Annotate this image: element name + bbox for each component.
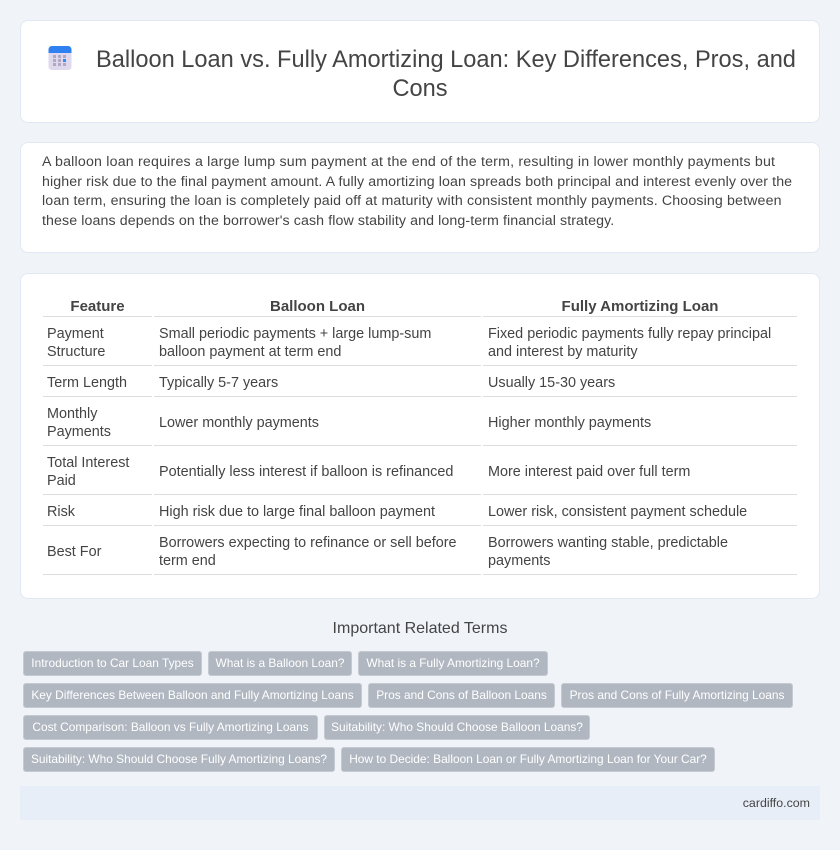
related terms tags: Cost Comparison: Balloon vs Fully Amortizing Loans: [32, 720, 309, 734]
comparison table: Lower monthly payments: [159, 415, 319, 431]
intro paragraph: loan term, ensuring the loan is completely paid off at maturity with consistent monthly payments. Choosing between: [42, 193, 782, 209]
related terms heading: Important Related Terms: [333, 620, 507, 637]
related terms tags: Suitability: Who Should Choose Balloon Loans?: [331, 720, 583, 734]
comparison table: Typically 5-7 years: [159, 375, 278, 391]
comparison table: balloon payment at term end: [159, 344, 341, 360]
panel: intro card: [20, 142, 820, 253]
comparison table: Borrowers expecting to refinance or sell before: [159, 535, 457, 551]
comparison table: Monthly: [47, 406, 97, 422]
related terms tags: Key Differences Between Balloon and Fully Amortizing Loans: [31, 688, 354, 702]
comparison table: Risk: [47, 504, 75, 520]
comparison table: Paid: [47, 473, 76, 489]
comparison table: Small periodic payments + large lump-sum: [159, 326, 431, 342]
comparison table: Potentially less interest if balloon is refinanced: [159, 464, 453, 480]
related terms tags: What is a Balloon Loan?: [216, 656, 344, 670]
title: Cons: [392, 76, 448, 102]
intro paragraph: A balloon loan requires a large lump sum payment at the end of the term, resulting in lower monthly payments but: [42, 154, 775, 170]
comparison table: term end: [159, 553, 216, 569]
related terms tags: Suitability: Who Should Choose Fully Amortizing Loans?: [31, 752, 327, 766]
title: Balloon Loan vs. Fully Amortizing Loan: Key Differences, Pros, and: [96, 47, 796, 73]
comparison table: Higher monthly payments: [488, 415, 651, 431]
intro paragraph: higher risk due to the final payment amount. A fully amortizing loan spreads both principal and interest evenly over the: [42, 174, 792, 190]
comparison table: Lower risk, consistent payment schedule: [488, 504, 747, 520]
footer: cardiffo.com: [743, 796, 810, 810]
related terms tags: [23, 651, 793, 772]
panel: title card: [20, 20, 820, 123]
comparison table: Total Interest: [47, 455, 129, 471]
comparison table: payments: [488, 553, 550, 569]
comparison table: Fully Amortizing Loan: [562, 298, 718, 314]
related terms tags: Introduction to Car Loan Types: [31, 656, 194, 670]
intro paragraph: these loans depends on the borrower's cash flow stability and long-term financial strategy.: [42, 213, 614, 229]
related terms tags: How to Decide: Balloon Loan or Fully Amortizing Loan for Your Car?: [349, 752, 707, 766]
comparison table: Balloon Loan: [270, 298, 365, 314]
comparison table: Usually 15-30 years: [488, 375, 615, 391]
intro paragraph: [42, 154, 792, 229]
comparison table: High risk due to large final balloon payment: [159, 504, 435, 520]
comparison table: and interest by maturity: [488, 344, 638, 360]
footer: [20, 786, 820, 820]
title: [96, 47, 796, 102]
icon: calendar: [48, 46, 72, 70]
panel: comparison card: [20, 273, 820, 599]
comparison table: Best For: [47, 544, 101, 560]
related terms tags: Pros and Cons of Fully Amortizing Loans: [570, 688, 784, 702]
comparison table: [43, 298, 797, 575]
related terms tags: What is a Fully Amortizing Loan?: [366, 656, 540, 670]
comparison table: Borrowers wanting stable, predictable: [488, 535, 728, 551]
comparison table: More interest paid over full term: [488, 464, 690, 480]
related terms tags: Pros and Cons of Balloon Loans: [376, 688, 547, 702]
comparison table: Term Length: [47, 375, 127, 391]
comparison table: Payments: [47, 424, 111, 440]
comparison table: Feature: [70, 298, 125, 314]
comparison table: Fixed periodic payments fully repay principal: [488, 326, 771, 342]
comparison table: Payment: [47, 326, 104, 342]
comparison table: Structure: [47, 344, 105, 360]
